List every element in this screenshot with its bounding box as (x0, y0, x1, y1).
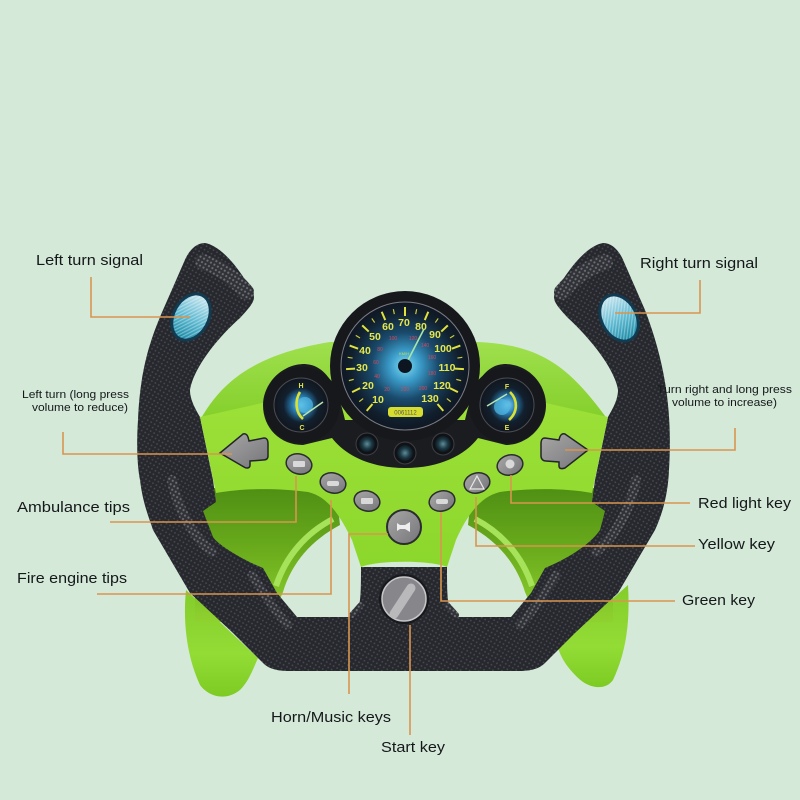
labels (17, 252, 793, 756)
fire engine button (318, 470, 348, 496)
minor ticks (348, 309, 462, 402)
callout line: right turn signal (615, 280, 700, 313)
callouts (63, 277, 735, 735)
red inner numbers: 80 (377, 347, 383, 353)
speedometer (330, 291, 480, 441)
speed numbers: 70 (398, 317, 410, 329)
left window highlight band (276, 519, 333, 586)
left gauge (264, 367, 340, 443)
label: right turn signal: Right turn signal (640, 255, 758, 272)
label: green key: Green key (682, 592, 756, 609)
ambulance button (284, 451, 314, 477)
right green window (468, 488, 613, 622)
left gauge: C (299, 425, 305, 432)
callout line: green key (441, 512, 675, 601)
red inner numbers: 180 (428, 371, 436, 377)
callout line: right turn (565, 428, 735, 450)
label: right turn volume: Turn right and long press (657, 384, 793, 396)
label: start key: Start key (381, 739, 446, 756)
right window highlight band (475, 519, 532, 586)
speed numbers (356, 317, 456, 406)
label: right turn volume (657, 384, 793, 409)
needle cap (398, 359, 412, 373)
red inner numbers: 60 (373, 360, 379, 366)
speed numbers: 30 (356, 362, 368, 374)
callout line: left turn (63, 432, 232, 454)
speed numbers: 60 (382, 321, 394, 333)
rim highlights (172, 262, 636, 625)
callout line: yellow key (476, 497, 695, 546)
callout line: left turn signal (91, 277, 190, 317)
red inner numbers: 120 (409, 336, 417, 342)
red inner numbers: 40 (374, 374, 380, 380)
speed numbers: 100 (434, 343, 452, 355)
label: left turn volume (22, 389, 130, 414)
odometer: 0061112 (394, 410, 417, 416)
black instrument cluster (263, 364, 546, 468)
horn button (387, 510, 421, 544)
callout line: red light key (511, 475, 690, 503)
left gauge: H (298, 383, 304, 390)
black rim (137, 243, 670, 671)
red inner numbers: 20 (384, 387, 390, 393)
label: left turn volume: Left turn (long press (22, 389, 130, 401)
unit label: KM/H (399, 351, 409, 356)
label: left turn volume: volume to reduce) (32, 402, 128, 414)
red inner numbers (373, 336, 436, 393)
label: red light key: Red light key (698, 495, 792, 512)
red inner numbers: 100 (389, 336, 397, 342)
speed numbers: 120 (433, 380, 451, 392)
label: ambulance tips: Ambulance tips (17, 499, 130, 516)
label: yellow key: Yellow key (698, 536, 776, 553)
label: horn and music keys: Horn/Music keys (271, 709, 391, 726)
red inner numbers: 220 (401, 387, 409, 393)
right gauge (469, 367, 545, 443)
speed numbers: 130 (421, 393, 439, 405)
speed numbers: 110 (439, 362, 456, 374)
red inner numbers: 200 (419, 386, 427, 392)
speed numbers: 90 (429, 329, 441, 341)
speed numbers: 10 (372, 394, 384, 406)
left arrow button (220, 434, 268, 468)
right gauge: F (505, 384, 510, 391)
red inner numbers: 160 (428, 355, 436, 361)
speed numbers: 20 (362, 380, 374, 392)
major ticks (346, 307, 464, 411)
callout line: start key (409, 625, 411, 735)
label: fire engine tips: Fire engine tips (17, 570, 127, 587)
yellow key button (462, 470, 492, 496)
left turn signal lamp (162, 285, 220, 349)
green hub (200, 403, 608, 567)
indicator beads (356, 433, 454, 464)
speed numbers: 40 (359, 345, 371, 357)
speed numbers: 80 (415, 321, 427, 333)
right arrow button (541, 434, 588, 469)
red light key button (495, 452, 525, 478)
truck button (352, 488, 382, 514)
green back shell (200, 342, 608, 420)
steering wheel toy (137, 243, 670, 697)
callout line: fire engine tips (97, 500, 331, 594)
label: right turn volume: volume to increase) (672, 397, 777, 409)
label: left turn signal: Left turn signal (36, 252, 143, 269)
red inner numbers: 140 (421, 343, 429, 349)
green key button (427, 488, 457, 514)
left green grip (185, 590, 258, 697)
right green grip (558, 585, 629, 687)
left green window (195, 488, 340, 622)
speed numbers: 50 (369, 331, 381, 343)
callout line: horn and music keys (349, 534, 388, 694)
right gauge: E (505, 425, 510, 432)
needle (405, 329, 424, 366)
callout line: ambulance tips (110, 476, 296, 522)
right turn signal lamp (590, 286, 648, 350)
start key knob (379, 574, 429, 624)
odometer (388, 407, 423, 417)
